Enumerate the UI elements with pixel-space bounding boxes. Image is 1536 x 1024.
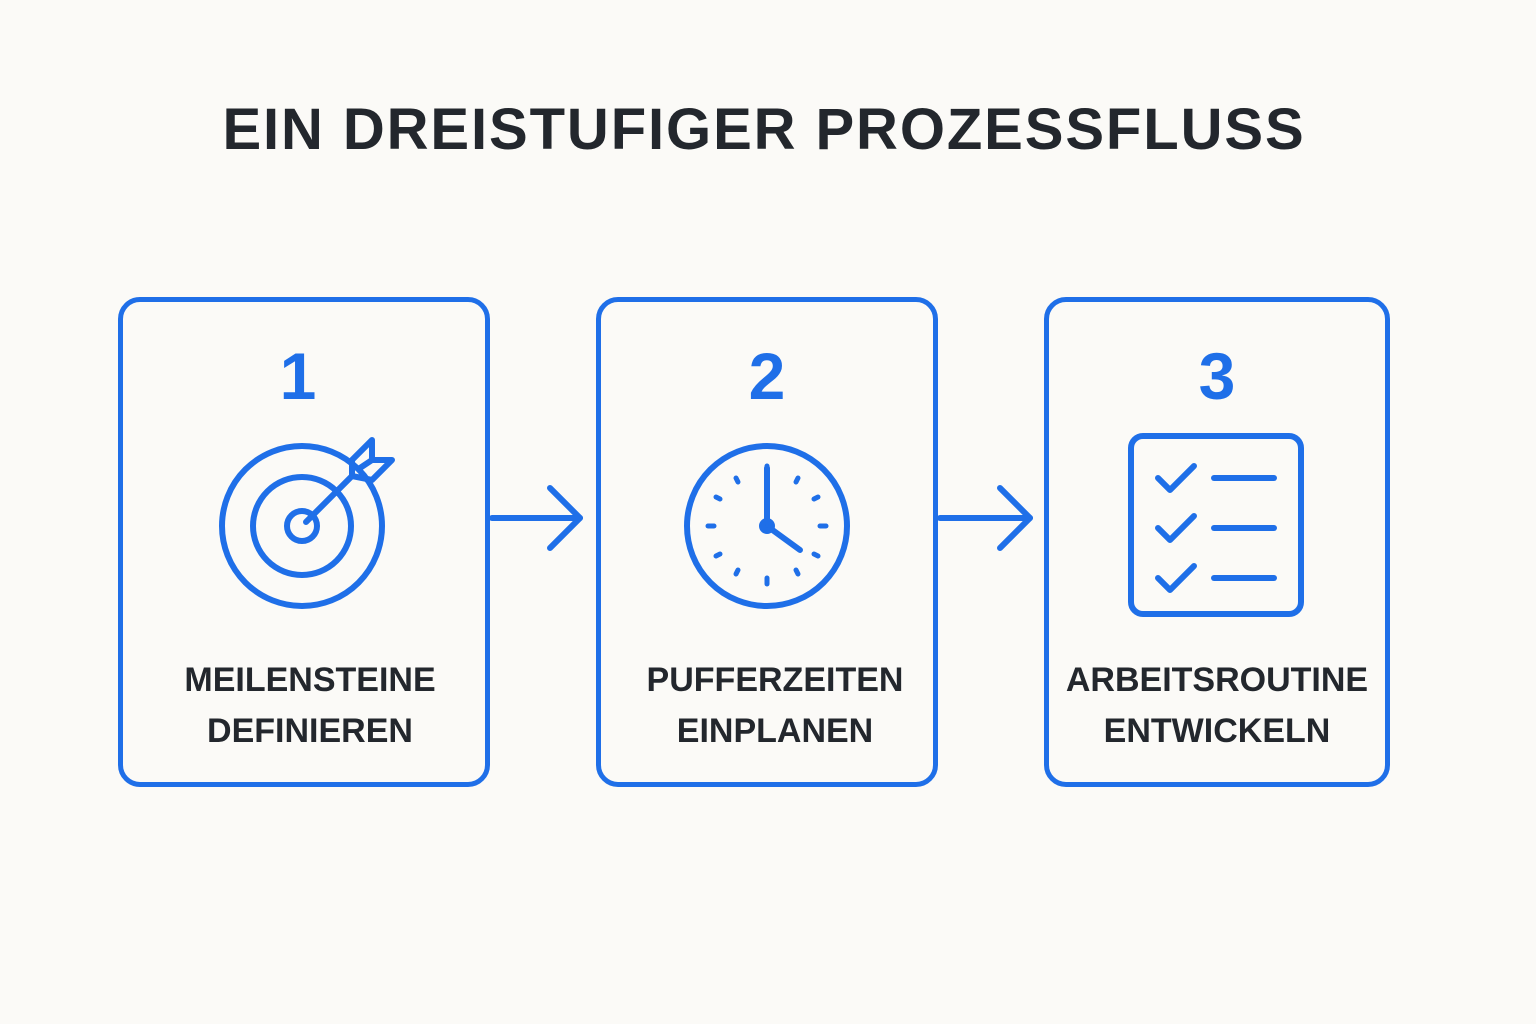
icon: checklist xyxy=(1131,436,1301,614)
number 1: 1 xyxy=(280,339,316,413)
icon: clock xyxy=(687,446,847,606)
label 1: MEILENSTEINE xyxy=(184,661,436,699)
number 3: 3 xyxy=(1199,339,1235,413)
arrow 2 xyxy=(940,488,1030,548)
label 3: ARBEITSROUTINE xyxy=(1066,661,1368,699)
title: EIN DREISTUFIGER PROZESSFLUSS xyxy=(222,97,1306,162)
label 2: EINPLANEN xyxy=(677,712,873,750)
label 2 xyxy=(647,661,903,750)
label 2: PUFFERZEITEN xyxy=(647,661,903,699)
label 1: DEFINIEREN xyxy=(207,712,413,750)
label 3: ENTWICKELN xyxy=(1104,712,1330,750)
number 2: 2 xyxy=(749,339,785,413)
arrow 1 xyxy=(492,488,580,548)
panel: step 1 xyxy=(118,297,490,787)
panel: step 3 xyxy=(1044,297,1390,787)
panel: step 2 xyxy=(596,297,938,787)
label 1 xyxy=(184,661,436,750)
label 3 xyxy=(1066,661,1368,750)
icon: target xyxy=(222,440,392,606)
